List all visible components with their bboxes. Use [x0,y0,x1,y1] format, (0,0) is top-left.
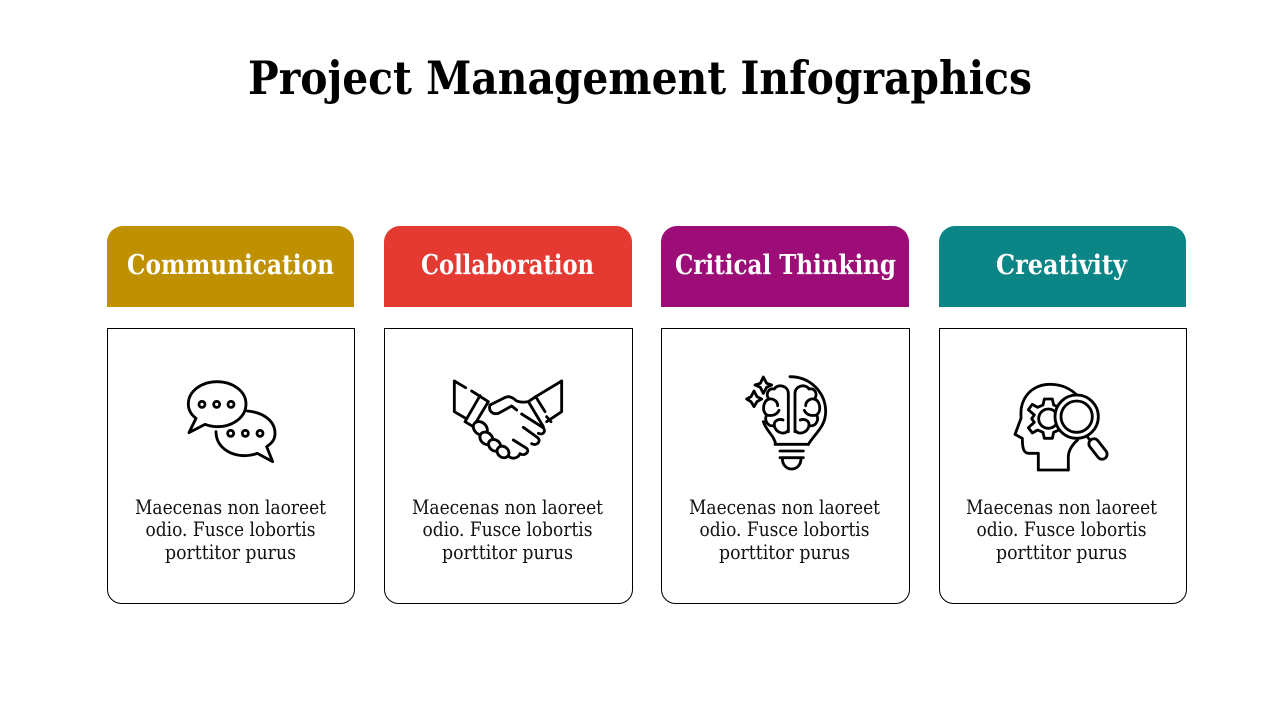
panel: critical thinking [661,226,910,604]
text: communication [135,495,326,564]
text: creativity: Maecenas non laoreet [966,495,1157,519]
heading: collaboration: Collaboration [421,250,594,281]
text: creativity: odio. Fusce lobortis [976,517,1146,541]
panel: collaboration [384,226,632,604]
text: creativity: porttitor purus [996,540,1127,564]
heading: critical thinking [661,226,909,307]
icon: brain light bulb [747,377,826,469]
heading: collaboration [384,226,632,307]
heading: communication: Communication [127,250,334,281]
text: critical thinking [689,495,880,564]
icon: head with gear and magnifier [1015,384,1109,470]
text: communication: Maecenas non laoreet [135,495,326,519]
text: creativity [966,495,1157,564]
text: communication: porttitor purus [165,540,296,564]
text: critical thinking: Maecenas non laoreet [689,495,880,519]
panel: creativity [939,226,1186,604]
text: collaboration: Maecenas non laoreet [412,495,603,519]
card: critical thinking [662,328,910,604]
title: Project Management Infographics [248,51,1032,105]
card: collaboration [384,328,632,604]
heading: critical thinking: Critical Thinking [675,250,896,281]
text: collaboration: odio. Fusce lobortis [422,517,592,541]
heading: creativity [939,226,1186,307]
heading: creativity: Creativity [996,250,1128,281]
heading: communication [107,226,354,307]
panel: communication [107,226,354,604]
text: communication: odio. Fusce lobortis [146,517,316,541]
icon: handshake [454,381,562,460]
card: creativity [940,328,1186,604]
icon: speech bubbles [188,382,275,462]
text: collaboration: porttitor purus [442,540,573,564]
text: critical thinking: porttitor purus [719,540,850,564]
text: collaboration [412,495,603,564]
text: critical thinking: odio. Fusce lobortis [700,517,870,541]
card: communication [108,328,354,604]
